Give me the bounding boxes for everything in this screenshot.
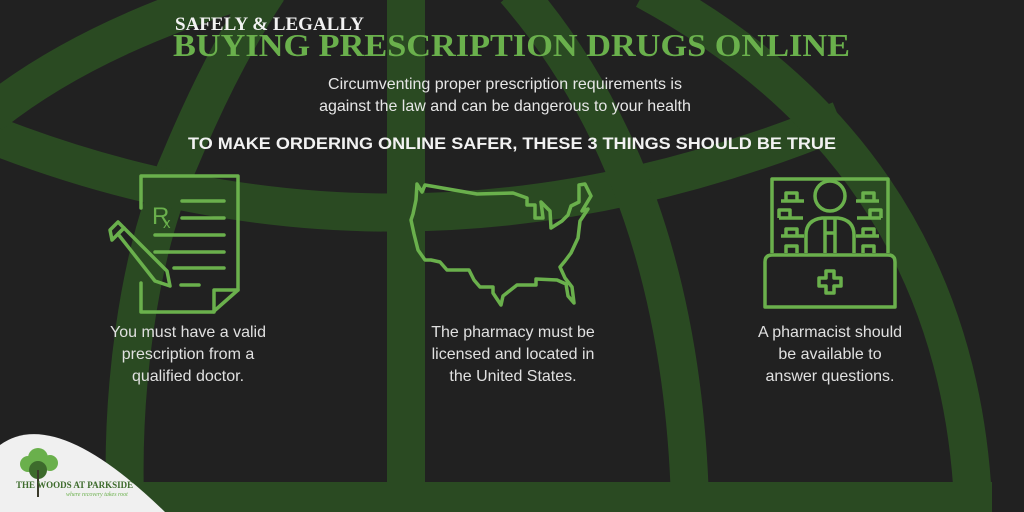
text: column 1: qualified doctor. xyxy=(132,368,244,385)
heading: TO MAKE ORDERING ONLINE SAFER, THESE 3 THINGS SHOULD BE TRUE xyxy=(188,134,836,153)
subtitle xyxy=(319,76,691,115)
subtitle: against the law and can be dangerous to your health xyxy=(319,98,691,115)
icon: prescription document: x xyxy=(163,215,171,232)
text: column 3 xyxy=(758,324,902,385)
text: column 3: answer questions. xyxy=(766,368,894,385)
logo: THE WOODS AT PARKSIDE xyxy=(16,480,133,490)
icon: prescription document: R xyxy=(152,203,169,230)
title: BUYING PRESCRIPTION DRUGS ONLINE xyxy=(173,27,850,63)
text: column 3: A pharmacist should xyxy=(758,324,902,341)
text: column 2: the United States. xyxy=(449,368,577,385)
icon: pharmacist xyxy=(765,179,895,307)
text: column 2: The pharmacy must be xyxy=(431,324,595,341)
text: column 2 xyxy=(431,324,595,385)
text: column 3: be available to xyxy=(778,346,882,363)
subtitle: Circumventing proper prescription requirements is xyxy=(328,76,682,93)
text: column 2: licensed and located in xyxy=(432,346,594,363)
icon: prescription document xyxy=(110,176,238,312)
icon: USA map xyxy=(411,184,591,305)
text: column 1 xyxy=(110,324,266,385)
logo: where recovery takes root xyxy=(66,492,128,498)
text: column 1: prescription from a xyxy=(122,346,254,363)
title xyxy=(173,14,850,63)
text: column 1: You must have a valid xyxy=(110,324,266,341)
title: SAFELY & LEGALLY xyxy=(175,14,364,35)
logo xyxy=(0,434,165,512)
